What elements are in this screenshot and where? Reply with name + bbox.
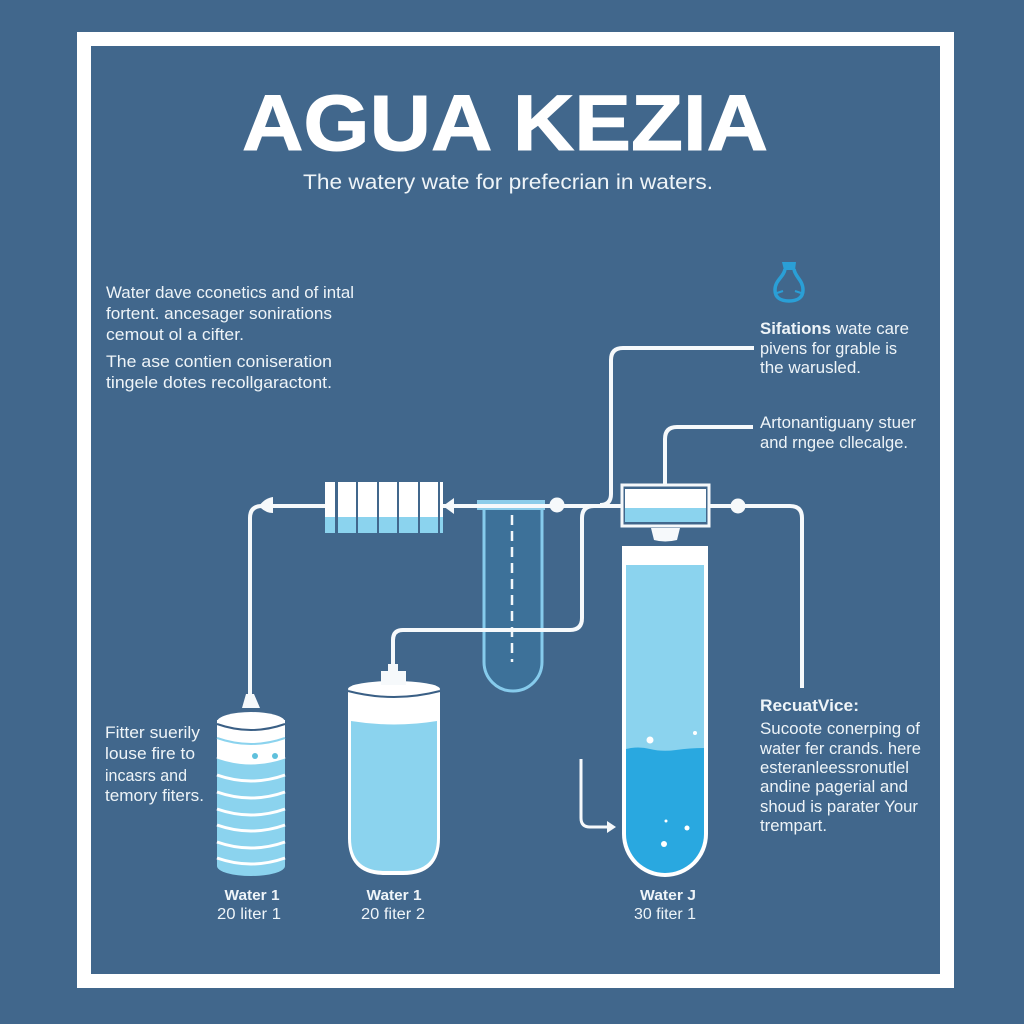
text block: filter note: louse fire to (105, 745, 195, 763)
title: AGUA KEZIA (242, 78, 768, 167)
icon: water bottle drop (775, 262, 803, 301)
tank label: Water 1 (366, 888, 422, 904)
text block: sifations callout: Sifations (760, 320, 831, 338)
text block: sifations callout: pivens for grable is (760, 340, 897, 358)
pipe: tank feed line (388, 506, 622, 671)
text block: intro top left: cemout ol a cifter. (106, 326, 244, 344)
tank label: 20 fiter 2 (361, 906, 425, 923)
tall water tube (622, 546, 708, 877)
filter cartridge (325, 482, 443, 533)
filter stack cylinder (217, 712, 285, 876)
clear filter tube (477, 500, 545, 691)
text block: artonantiguany callout (760, 414, 917, 452)
text block: recuatvice (759, 697, 921, 835)
stack label: Water 1 (224, 888, 280, 904)
text block: intro top left: Water dave cconetics and of intal (106, 284, 354, 302)
arrow into tube (581, 759, 616, 833)
pipe: callout line to artonantiguany (665, 427, 753, 485)
pipe: left run from cartridge to filter stack (242, 497, 325, 708)
stack label (217, 888, 281, 923)
pipe: cartridge to top unit (443, 498, 622, 514)
text block: filter note: temory fiters. (105, 787, 204, 805)
text block: recuatvice: Sucoote conerping of (760, 720, 920, 738)
text block: artonantiguany callout: and rngee cllecalge. (760, 434, 908, 452)
text block: intro top left: The ase contien coniseration (106, 353, 332, 371)
white frame (84, 39, 947, 981)
pipe: right run down to recuatvice (710, 498, 802, 688)
storage tank (348, 671, 440, 875)
stack label: 20 liter 1 (217, 906, 281, 923)
text block: recuatvice: trempart. (760, 817, 827, 835)
text block: recuatvice: andine pagerial and (760, 778, 908, 796)
text block: recuatvice: water fer crands. here (759, 740, 921, 758)
tank label (361, 888, 425, 923)
subtitle: The watery wate for prefecrian in waters. (303, 171, 713, 194)
tube label: 30 fiter 1 (634, 906, 696, 923)
text block: intro top left: fortent. ancesager sonirations (106, 305, 332, 323)
text block: sifations callout (760, 320, 909, 377)
text block: filter note (105, 724, 204, 805)
tube label (634, 888, 696, 923)
top control unit (622, 485, 709, 542)
text block: sifations callout: wate care (835, 320, 909, 338)
text block: filter note: incasrs and (105, 767, 187, 785)
text block: intro top left: tingele dotes recollgaractont. (106, 374, 332, 392)
text block: recuatvice: shoud is parater Your (760, 798, 919, 816)
tube label: Water J (640, 888, 696, 904)
pipe: callout line to sifations (600, 348, 754, 505)
text block: artonantiguany callout: Artonantiguany stuer (760, 414, 917, 432)
text block: intro top left (106, 284, 354, 392)
text block: recuatvice: esteranleessronutlel (760, 759, 909, 777)
text block: recuatvice: RecuatVice: (760, 697, 859, 715)
text block: sifations callout: the warusled. (760, 359, 861, 377)
text block: filter note: Fitter suerily (105, 724, 201, 742)
